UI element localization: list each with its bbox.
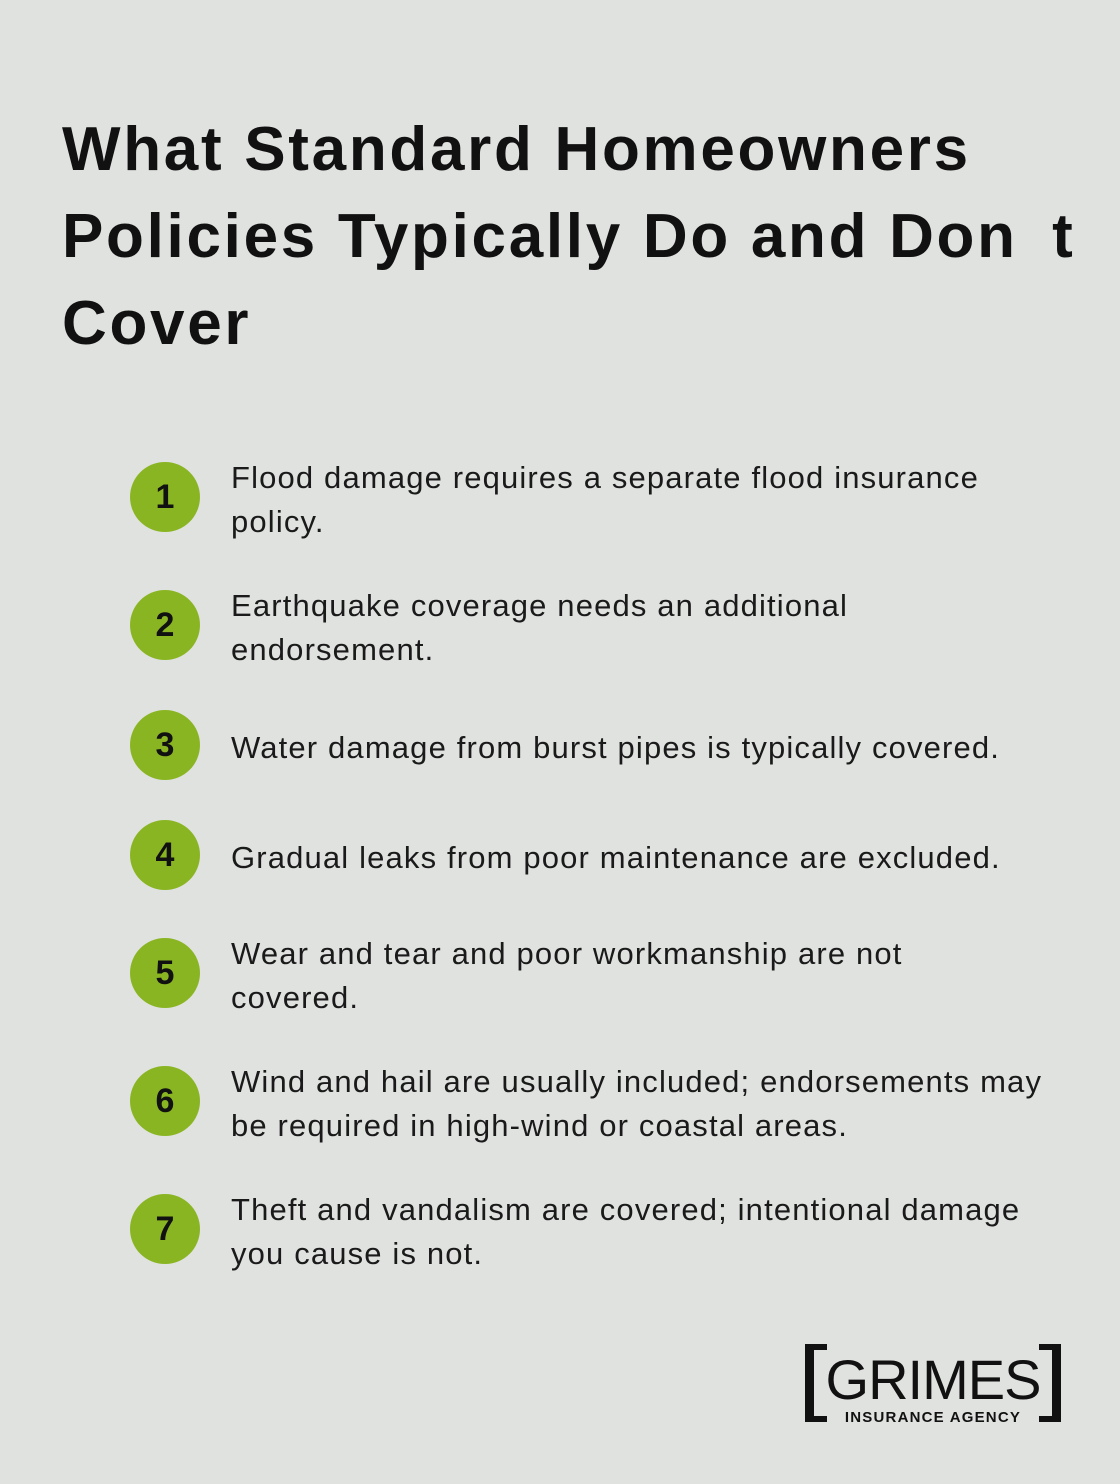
- item 4: Gradual leaks from poor maintenance are excluded.: [231, 840, 1001, 875]
- item 5: Wear and tear and poor workmanship are not: [231, 936, 903, 971]
- item 6: Wind and hail are usually included; endorsements may: [231, 1064, 1042, 1099]
- item 7: Theft and vandalism are covered; intentional damage: [231, 1192, 1020, 1227]
- item 1: Flood damage requires a separate flood insurance: [231, 460, 979, 495]
- item 2: Earthquake coverage needs an additional: [231, 588, 848, 623]
- title: Cover: [62, 289, 251, 358]
- logo: GRIMES: [826, 1348, 1040, 1411]
- item 1: 1: [156, 478, 174, 516]
- logo: [805, 1344, 1061, 1426]
- item 1: [130, 460, 979, 539]
- title: [62, 115, 1076, 358]
- item 2: [130, 588, 848, 667]
- item 3: Water damage from burst pipes is typically covered.: [231, 730, 1000, 765]
- item 6: be required in high-wind or coastal areas.: [231, 1108, 848, 1143]
- item 4: 4: [156, 836, 174, 874]
- item 6: 6: [156, 1082, 174, 1120]
- item 7: [130, 1192, 1020, 1271]
- item 3: 3: [156, 726, 174, 764]
- logo: INSURANCE AGENCY: [845, 1409, 1021, 1426]
- item 5: [130, 936, 903, 1015]
- item 7: 7: [156, 1210, 174, 1248]
- item 3: [130, 710, 1000, 780]
- item 2: endorsement.: [231, 632, 434, 667]
- item 1: policy.: [231, 504, 325, 539]
- item 6: [130, 1064, 1042, 1143]
- item 4: [130, 820, 1001, 890]
- title: What Standard Homeowners: [62, 115, 971, 184]
- item 7: you cause is not.: [231, 1236, 483, 1271]
- item 2: 2: [156, 606, 174, 644]
- item 5: covered.: [231, 980, 359, 1015]
- item 5: 5: [156, 954, 174, 992]
- title: Policies Typically Do and Don t: [62, 202, 1076, 271]
